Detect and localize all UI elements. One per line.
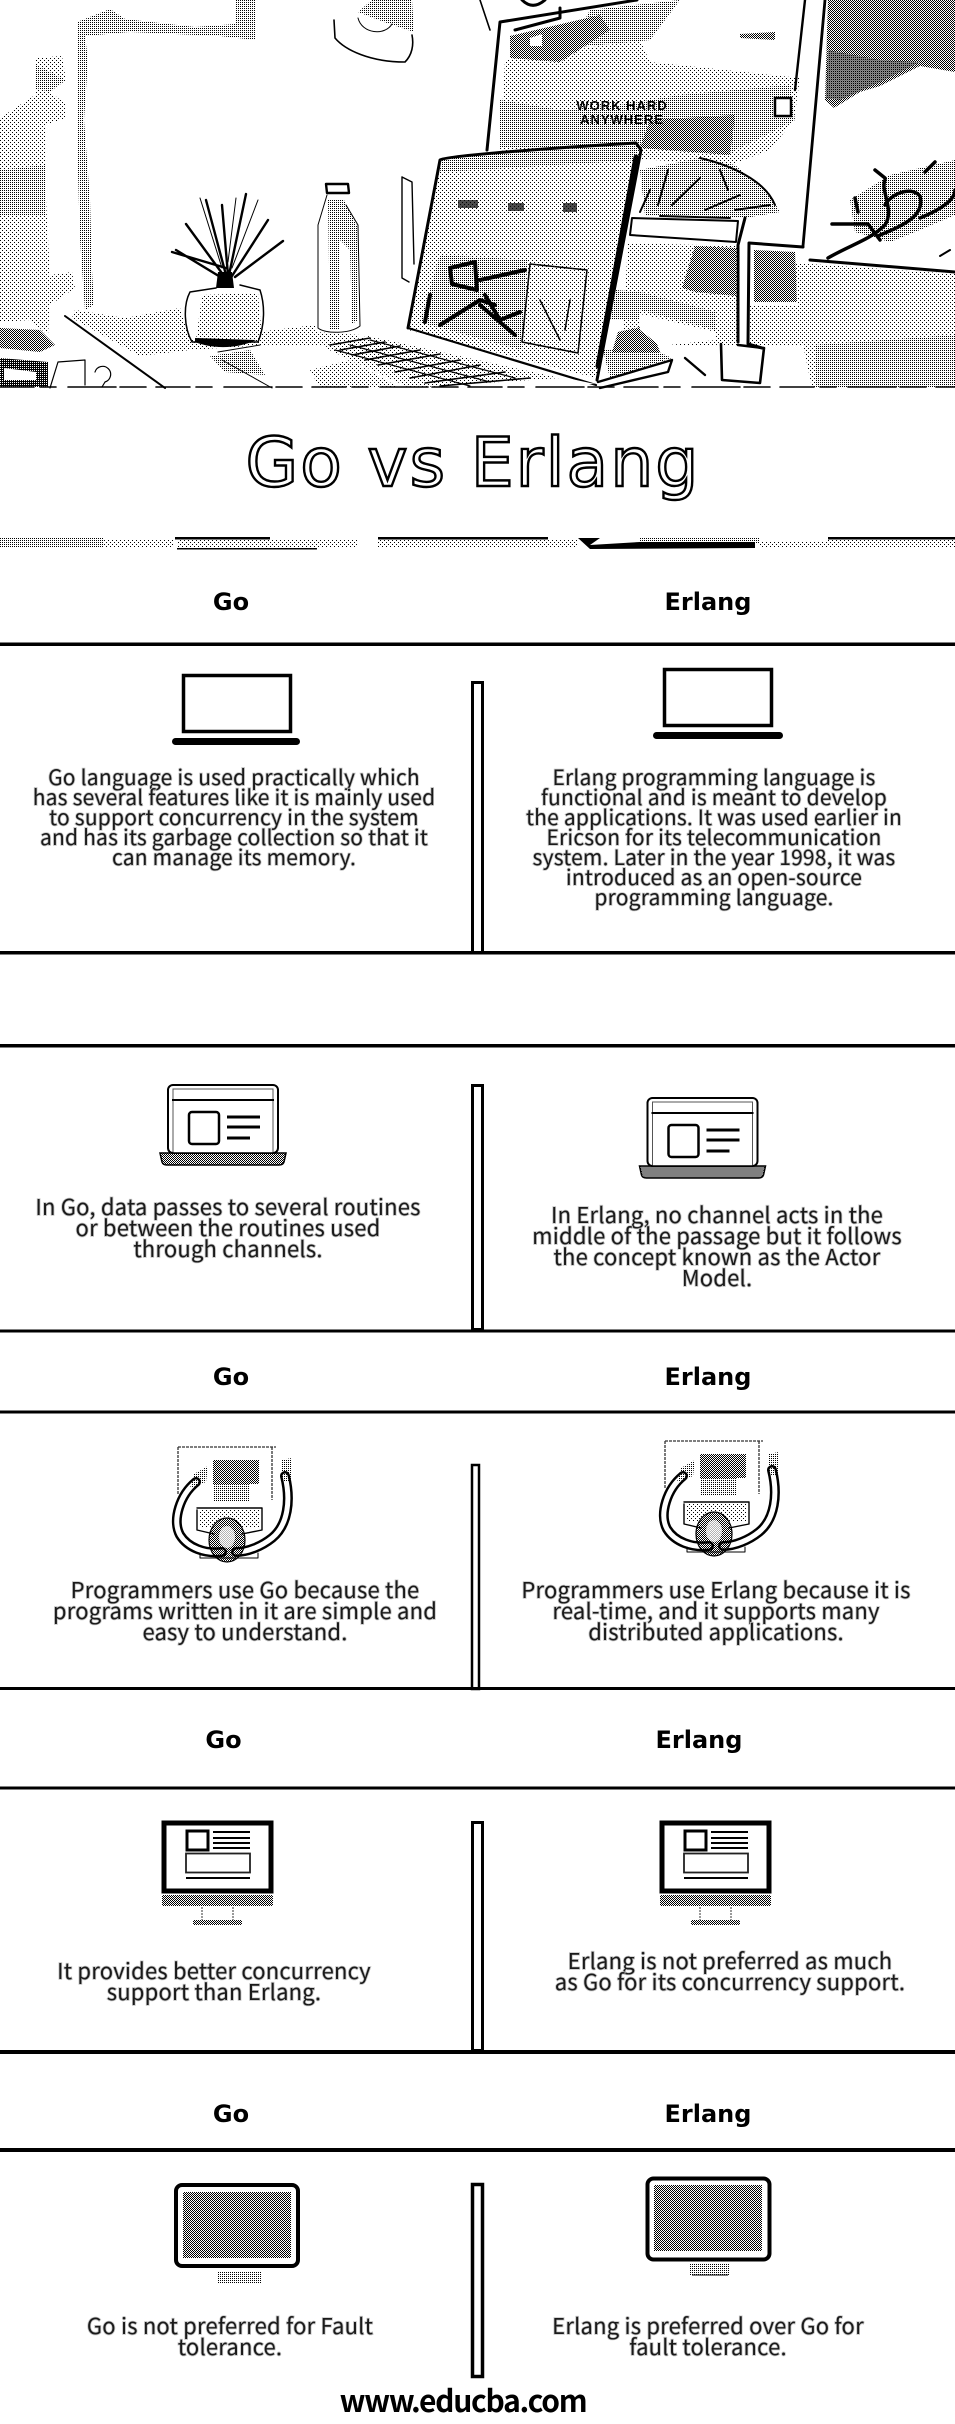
laptop keyboard: [210, 336, 705, 388]
text: Erlang programmers: distributed applications.: [588, 1615, 844, 1647]
cable on wall: [402, 177, 414, 282]
section 4 header: Go: Go: [205, 1726, 242, 1754]
text: Go channels: [35, 1190, 421, 1264]
icon: laptop with page (Go): [160, 1085, 286, 1165]
text: Go concurrency: support than Erlang.: [107, 1975, 321, 2007]
section 3 divider: [472, 1465, 479, 1689]
text: Erlang actor model: the concept known as the Actor: [554, 1240, 881, 1272]
text: Erlang concurrency: [555, 1944, 905, 1997]
text: Go concurrency: [57, 1954, 371, 2007]
icon: desktop monitor (Go): [162, 1823, 273, 1925]
text: Erlang actor model: middle of the passage but it follows: [532, 1219, 902, 1251]
text: Erlang concurrency: as Go for its concurrency support.: [555, 1965, 905, 1997]
section 2 bottom rule: [0, 1330, 955, 1332]
right plant: [810, 160, 955, 272]
text: Go language description: to support concurrency in the system: [49, 802, 419, 832]
text: Erlang description: Ericson for its telecommunication: [546, 822, 882, 852]
text: Erlang description: programming language.: [594, 882, 834, 912]
text: Go language description: has several features like it is mainly used: [33, 782, 435, 812]
text: Go programmers: Programmers use Go because the: [71, 1573, 419, 1605]
text: Erlang fault tolerance: [552, 2309, 864, 2362]
text: Go language description: can manage its memory.: [112, 842, 356, 872]
section 5 top rule: [0, 2148, 955, 2152]
text: Erlang programmers: [521, 1573, 911, 1647]
section 2 top rule: [0, 1044, 955, 1048]
text: Erlang fault tolerance: fault tolerance.: [629, 2330, 787, 2362]
back monitor: [480, 0, 825, 246]
section 3 header: Go: Go: [213, 1363, 249, 1391]
section 1 divider: [472, 682, 482, 952]
icon: laptop with page (Erlang): [640, 1098, 766, 1178]
text: Go language description: Go language is used practically which: [48, 762, 420, 792]
icon: monitor with dark screen (Go): [176, 2185, 298, 2284]
hero photo: desk with laptop: [0, 0, 955, 388]
text: Erlang actor model: In Erlang, no channel acts in the: [551, 1198, 883, 1230]
text: Erlang description: [526, 762, 902, 912]
icon: laptop (Go): [172, 676, 300, 745]
section 5 header: Go: Go: [213, 2100, 249, 2128]
icon: programmer at desk (Erlang): [664, 1441, 779, 1556]
potted plant: [172, 194, 283, 347]
text: Erlang description: introduced as an open-source: [566, 862, 862, 892]
text: Erlang actor model: [532, 1198, 902, 1293]
bottom edge of photo: [0, 386, 955, 388]
text: Go concurrency: It provides better concurrency: [57, 1954, 371, 1986]
text: Erlang concurrency: Erlang is not preferred as much: [568, 1944, 892, 1976]
section 3 header: Erlang: Erlang: [665, 1363, 751, 1391]
text: Go channels: through channels.: [133, 1232, 323, 1264]
desk shadow left: [0, 308, 320, 388]
text: Erlang description: functional and is meant to develop: [541, 782, 887, 812]
water bottle: [265, 184, 360, 352]
drawers under stand: [610, 243, 737, 352]
desk lamp: [334, 0, 414, 62]
text: Erlang description: system. Later in the year 1998, it was: [533, 842, 895, 872]
section 2 divider: [472, 1086, 482, 1330]
small monitor and cup: [721, 243, 803, 383]
section 5 divider: [472, 2184, 482, 2376]
text: Erlang programmers: real-time, and it supports many: [552, 1594, 880, 1626]
section 5 header: Erlang: Erlang: [665, 2100, 751, 2128]
text: Erlang fault tolerance: Erlang is preferred over Go for: [552, 2309, 864, 2341]
section 4 header: Erlang: Erlang: [656, 1726, 742, 1754]
title: Go vs Erlang: [246, 424, 700, 503]
left wall shadow blob: [0, 56, 75, 335]
text: Erlang programmers: Programmers use Erlang because it is: [521, 1573, 911, 1605]
section 4 top rule: [0, 1786, 955, 1790]
icon: monitor with dark screen (Erlang): [648, 2178, 770, 2275]
text: Erlang description: Erlang programming language is: [552, 762, 876, 792]
section 3 bottom rule: [0, 1687, 955, 1690]
icon: laptop (Erlang): [653, 670, 783, 739]
text: Erlang description: the applications. It was used earlier in: [526, 802, 902, 832]
text: Erlang actor model: Model.: [682, 1261, 752, 1293]
section 4 divider: [472, 1822, 482, 2050]
text: Go fault tolerance: Go is not preferred for Fault: [87, 2309, 373, 2341]
laptop screen icons: [458, 200, 577, 212]
section 4 bottom rule: [0, 2050, 955, 2054]
laptop screen: [408, 143, 641, 385]
section 1 header: Go: Go: [213, 588, 249, 616]
back monitor: ANYWHERE: [580, 112, 664, 127]
icon: desktop monitor (Erlang): [660, 1823, 771, 1925]
monitor caption: WORK HARD: [576, 98, 668, 113]
text: Go programmers: programs written in it are simple and: [53, 1594, 437, 1626]
icon: programmer at desk (Go): [177, 1447, 292, 1562]
section 1 bottom rule: [0, 951, 955, 954]
poster shadow on wall: [77, 0, 255, 310]
section 3 top rule: [0, 1410, 955, 1414]
text: Go channels: In Go, data passes to several routines: [35, 1190, 421, 1222]
text: Go language description: and has its garbage collection so that it: [40, 822, 428, 852]
foliage on stand: [630, 158, 780, 342]
section 1 top rule: [0, 642, 955, 646]
text: Go programmers: easy to understand.: [142, 1615, 348, 1647]
text: Go fault tolerance: [87, 2309, 373, 2362]
right desk surface: [750, 263, 955, 388]
text: Go fault tolerance: tolerance.: [178, 2330, 282, 2362]
right dark panel: [825, 0, 955, 108]
text: Go programmers: [53, 1573, 437, 1647]
text: Go channels: or between the routines used: [76, 1211, 380, 1243]
laptop screen windows: [420, 255, 587, 353]
footer website: www.educba.com: [340, 2377, 586, 2421]
section 1 header: Erlang: Erlang: [665, 588, 751, 616]
text: Go language description: [33, 762, 435, 872]
decorative photo strip: [0, 537, 955, 550]
